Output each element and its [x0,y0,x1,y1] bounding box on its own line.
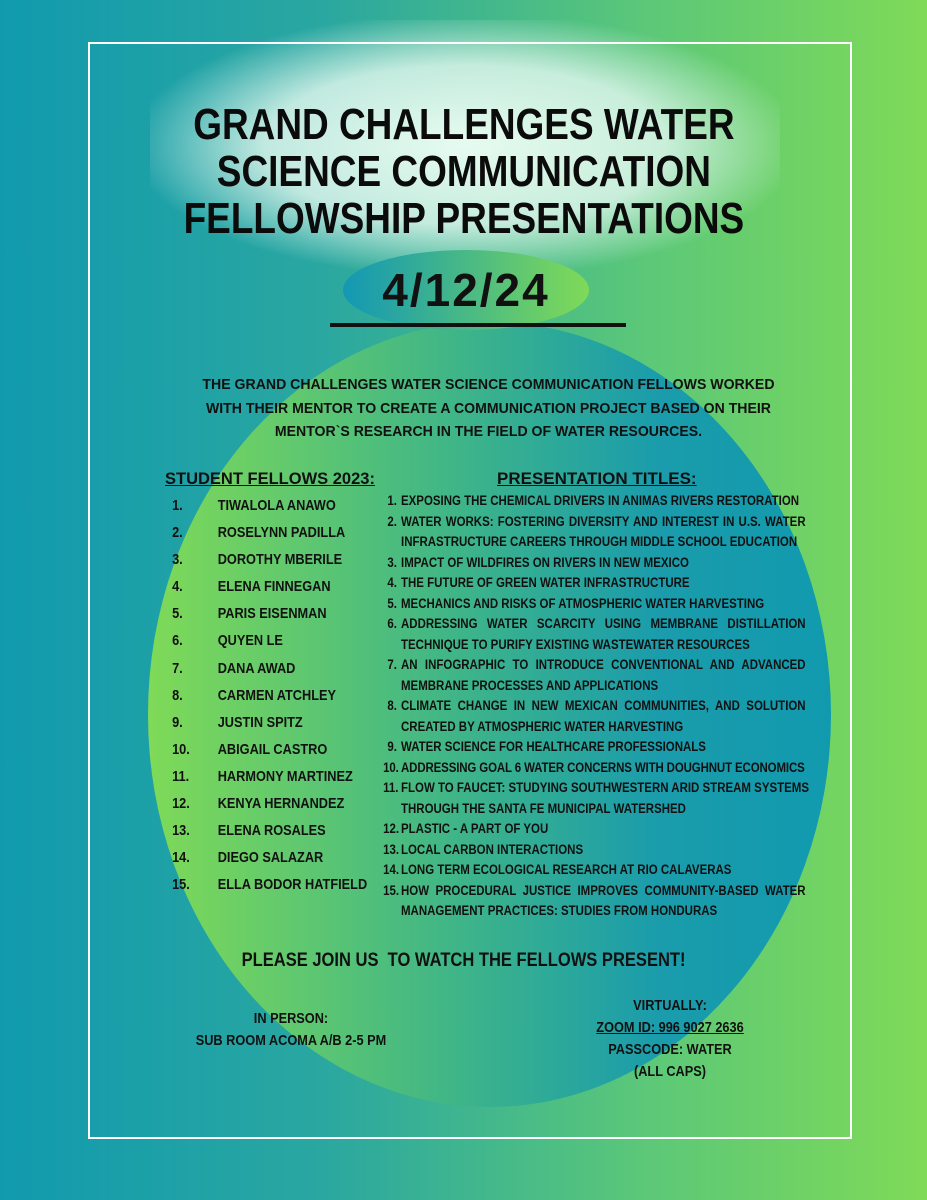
student fellows list: 6. [172,632,183,649]
student fellows list: 12. [172,795,190,812]
student fellows list: TIWALOLA ANAWO [218,497,336,514]
student fellows list [165,470,375,893]
text: 11. [383,780,398,795]
in person info [196,1010,386,1049]
text: 1. [387,493,397,508]
presentation titles list: THE FUTURE OF GREEN WATER INFRASTRUCTURE [401,575,690,590]
student fellows list: 7. [172,660,183,677]
text: 9. [387,739,397,754]
virtual info: PASSCODE: WATER [608,1041,732,1058]
student fellows list: 13. [172,822,190,839]
student fellows list: 2. [172,524,183,541]
student fellows list: DOROTHY MBERILE [218,551,342,568]
presentation titles heading: PRESENTATION TITLES: [497,469,697,488]
student fellows list: 3. [172,551,183,568]
student fellows list: HARMONY MARTINEZ [218,768,353,785]
title glow [150,20,780,270]
presentation titles list: MEMBRANE PROCESSES AND APPLICATIONS [401,678,658,692]
student fellows list: 9. [172,714,183,731]
main ellipse [148,322,831,1107]
student fellows list: DIEGO SALAZAR [218,849,323,866]
presentation titles list: CLIMATE CHANGE IN NEW MEXICAN COMMUNITIES, AND SOLUTION [401,698,806,713]
student fellows list: ELENA FINNEGAN [218,578,331,595]
text: 7. [387,657,397,672]
student fellows list: CARMEN ATCHLEY [218,687,336,704]
frame [88,42,852,1139]
in person info: IN PERSON: [254,1010,328,1027]
presentation titles list: CREATED BY ATMOSPHERIC WATER HARVESTING [401,718,683,734]
in person info: SUB ROOM ACOMA A/B 2-5 PM [196,1032,386,1049]
student fellows list: STUDENT FELLOWS 2023: [165,470,375,488]
virtual info: (ALL CAPS) [634,1063,706,1080]
text: 8. [387,698,397,713]
date badge: 4/12/24 [382,264,550,316]
student fellows list: ROSELYNN PADILLA [218,524,345,541]
presentation titles list: PLASTIC - A PART OF YOU [401,821,548,836]
virtual info: ZOOM ID: 996 9027 2636 [596,1019,744,1036]
intro text: MENTOR`S RESEARCH IN THE FIELD OF WATER RESOURCES. [275,423,702,440]
intro text: WITH THEIR MENTOR TO CREATE A COMMUNICATION PROJECT BASED ON THEIR [206,400,771,416]
student fellows list: ABIGAIL CASTRO [218,741,327,758]
presentation titles list: MECHANICS AND RISKS OF ATMOSPHERIC WATER HARVESTING [401,596,764,610]
text: 3. [387,554,397,570]
student fellows list: 1. [172,497,183,514]
text: 4. [387,575,397,590]
presentation titles list: WATER WORKS: FOSTERING DIVERSITY AND INTEREST IN U.S. WATER [401,514,806,528]
student fellows list: ELENA ROSALES [218,822,326,839]
presentation titles list: INFRASTRUCTURE CAREERS THROUGH MIDDLE SCHOOL EDUCATION [401,534,797,549]
presentation titles list: HOW PROCEDURAL JUSTICE IMPROVES COMMUNITY-BASED WATER [401,882,806,898]
student fellows list: 4. [172,578,183,595]
title: GRAND CHALLENGES WATER [193,100,735,149]
text: 13. [383,842,399,856]
presentation titles list: EXPOSING THE CHEMICAL DRIVERS IN ANIMAS RIVERS RESTORATION [401,493,799,508]
text: 12. [383,821,399,836]
intro text [202,376,775,440]
title [184,100,744,243]
title: FELLOWSHIP PRESENTATIONS [184,194,744,243]
presentation titles list: AN INFOGRAPHIC TO INTRODUCE CONVENTIONAL AND ADVANCED [401,657,806,672]
presentation titles list: ADDRESSING WATER SCARCITY USING MEMBRANE DISTILLATION [401,616,806,631]
text: 2. [387,514,397,528]
presentation titles list [383,493,809,918]
date badge [343,250,589,330]
intro text: THE GRAND CHALLENGES WATER SCIENCE COMMUNICATION FELLOWS WORKED [202,376,775,393]
presentation titles list: LOCAL CARBON INTERACTIONS [401,842,583,856]
student fellows list: DANA AWAD [218,660,295,677]
title: SCIENCE COMMUNICATION [217,147,711,196]
student fellows list: 11. [172,768,189,785]
text: 5. [387,596,397,610]
presentation titles list: ADDRESSING GOAL 6 WATER CONCERNS WITH DOUGHNUT ECONOMICS [401,760,805,774]
student fellows list: ELLA BODOR HATFIELD [218,876,367,893]
presentation titles list: TECHNIQUE TO PURIFY EXISTING WASTEWATER RESOURCES [401,636,750,652]
text: 15. [383,882,399,898]
student fellows list: 14. [172,849,190,866]
presentation titles list: THROUGH THE SANTA FE MUNICIPAL WATERSHED [401,800,686,816]
student fellows list: KENYA HERNANDEZ [218,795,344,812]
presentation titles list: LONG TERM ECOLOGICAL RESEARCH AT RIO CALAVERAS [401,862,731,877]
virtual info: VIRTUALLY: [633,997,707,1014]
presentation titles list: MANAGEMENT PRACTICES: STUDIES FROM HONDURAS [401,903,717,918]
presentation titles list: FLOW TO FAUCET: STUDYING SOUTHWESTERN ARID STREAM SYSTEMS [401,780,809,795]
presentation titles list: IMPACT OF WILDFIRES ON RIVERS IN NEW MEXICO [401,554,689,570]
student fellows list: 5. [172,605,183,622]
text: 14. [383,862,399,877]
student fellows list: 15. [172,876,190,893]
student fellows list: PARIS EISENMAN [218,605,327,622]
student fellows list: 8. [172,687,183,704]
presentation titles list: WATER SCIENCE FOR HEALTHCARE PROFESSIONALS [401,739,706,754]
virtual info [596,997,744,1080]
student fellows list: QUYEN LE [218,632,283,649]
text: 10. [383,760,399,774]
student fellows list: 10. [172,741,190,758]
join heading: PLEASE JOIN US TO WATCH THE FELLOWS PRESENT! [242,950,686,971]
date underline [330,323,626,327]
student fellows list: JUSTIN SPITZ [218,714,303,731]
text: 6. [387,616,397,631]
